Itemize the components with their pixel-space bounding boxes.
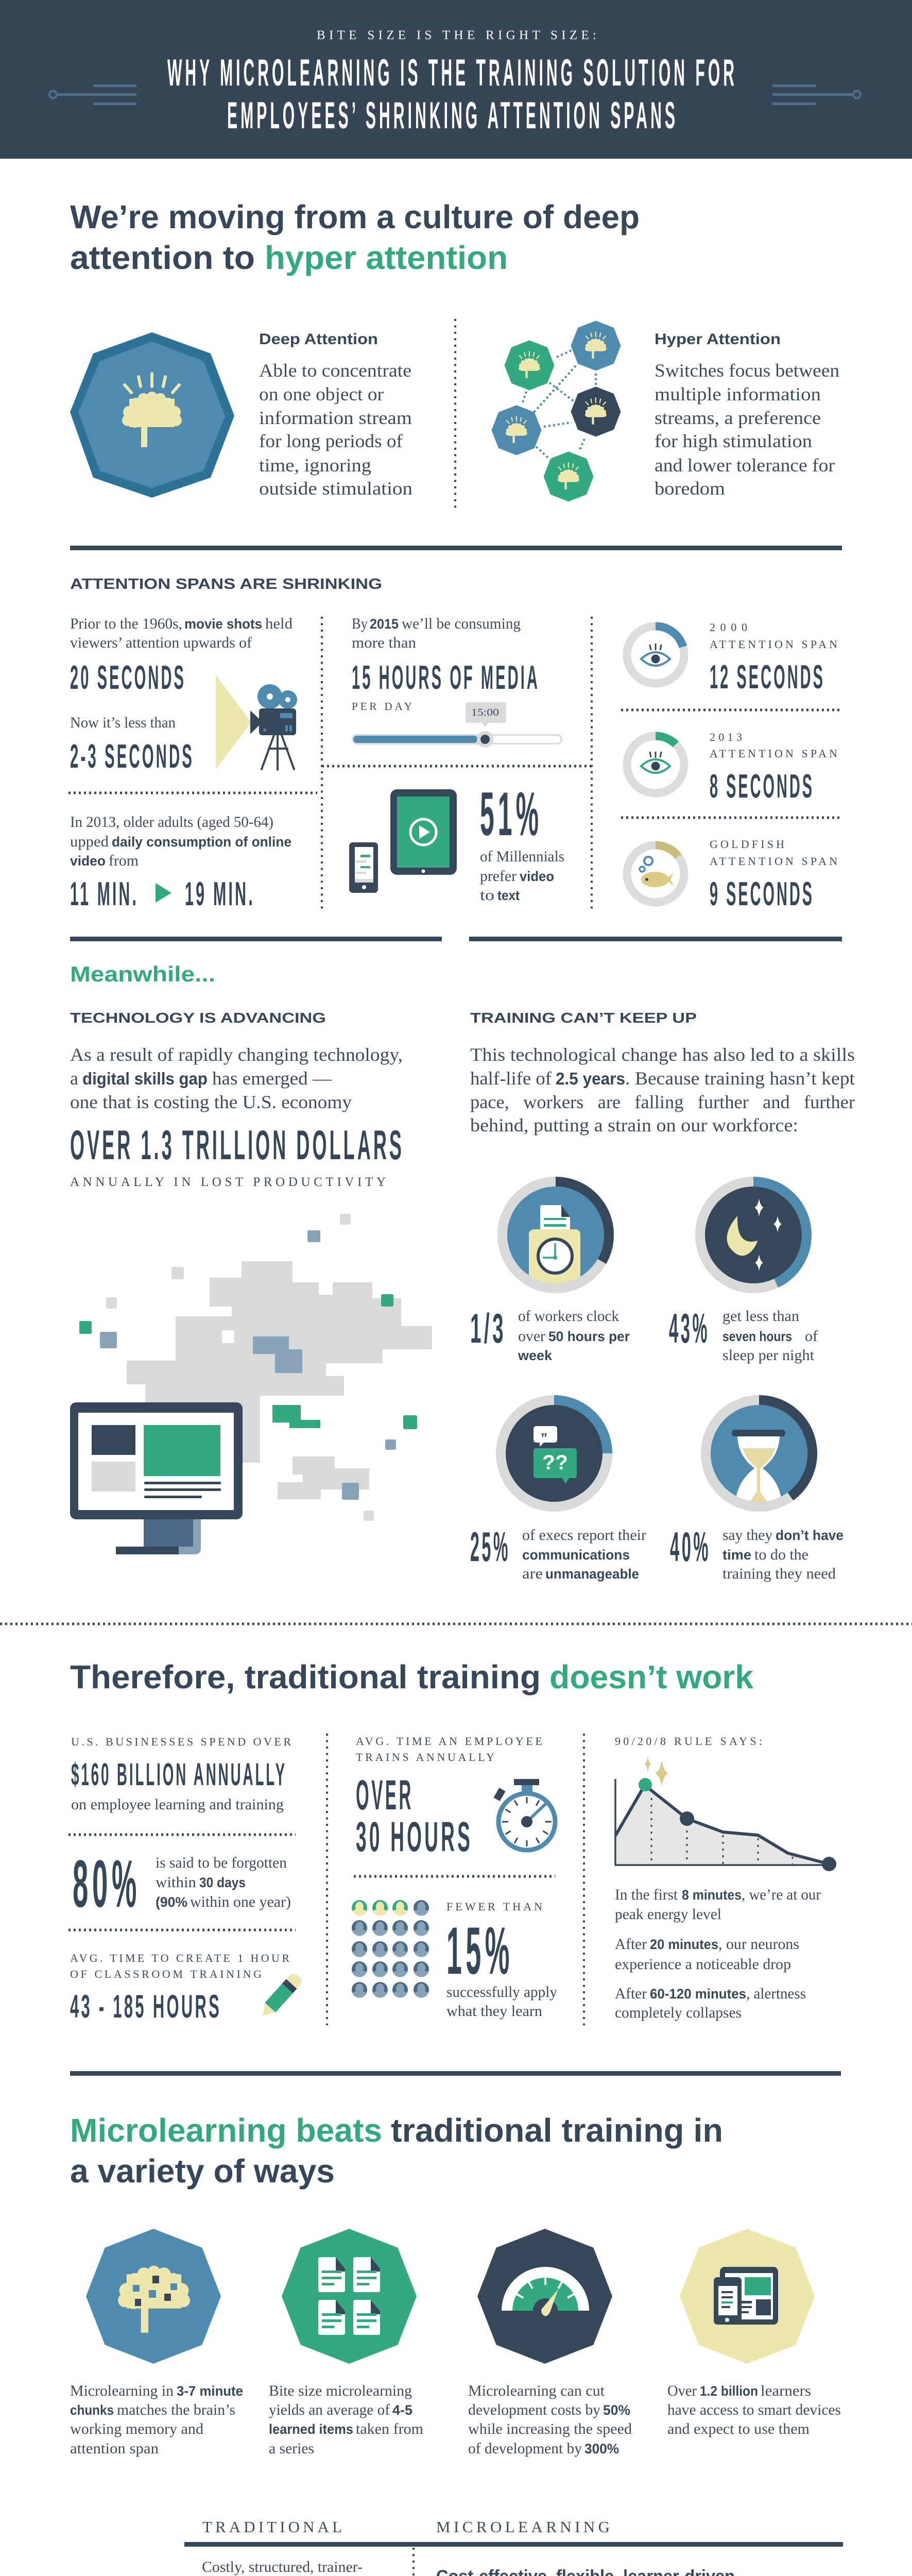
stat: 40 percent no time: time — [722, 1547, 751, 1563]
text: 90/20/8 rule details: , our neurons — [718, 1936, 799, 1953]
stat: 43 to 185 hours: OF CLASSROOM TRAINING — [70, 1968, 262, 1980]
donut: hourglass 40 percent — [705, 1400, 813, 1506]
text: cut development costs: of development by — [468, 2440, 582, 2457]
stat: 43 to 185 hours — [70, 1952, 289, 2025]
stat: older adults online video — [70, 814, 291, 912]
stat: 80 percent forgotten: 30 days — [199, 1875, 246, 1890]
stat: 43 percent sleep: seven hours — [722, 1329, 792, 1344]
stat: movie shots: movie shots — [184, 616, 262, 632]
stat: 43 percent sleep: 43% — [669, 1306, 710, 1352]
heading: deep to hyper attention: We’re moving from a culture of deep — [70, 198, 640, 235]
text: hyper attention — [655, 331, 839, 499]
stat: 43 percent sleep: get less than — [722, 1308, 799, 1325]
icon: brain with memory chunks — [86, 2229, 221, 2364]
text: 4-5 learned items: yields an average of — [269, 2401, 390, 2418]
text: 90/20/8 rule details: In the first — [615, 1886, 678, 1903]
stat: fewer than 15 percent: successfully apply — [446, 1984, 557, 2001]
stat: 40 percent no time: don’t have — [776, 1528, 844, 1543]
map of pixel blocks — [79, 1214, 432, 1521]
text: 2000 attention span — [710, 621, 837, 696]
main title — [167, 52, 737, 137]
text: 3-7 minute chunks: working memory and — [70, 2420, 203, 2437]
panel: training can't keep up: behind, putting a strain on our workforce: — [470, 1115, 798, 1136]
text: hyper attention: streams, a preference — [655, 408, 821, 428]
panel: technology is advancing: As a result of rapidly changing technology, — [70, 1044, 403, 1065]
stat: 25 percent execs: communications — [522, 1547, 630, 1563]
text: 90/20/8 rule heading: 90/20/8 RULE SAYS: — [615, 1735, 762, 1748]
stat: older adults online video: 19 MIN. — [185, 875, 255, 912]
text: deep attention: Able to concentrate — [259, 360, 411, 381]
stat: 1/3 of workers: 1/3 — [470, 1306, 506, 1352]
heading: attention spans are shrinking: ATTENTION SPANS ARE SHRINKING — [70, 576, 382, 592]
text: 1.2 billion learners: and expect to use them — [667, 2420, 810, 2437]
stat: 160 billion annually: on employee learning and training — [71, 1796, 284, 1813]
text: 1.2 billion learners: Over — [667, 2382, 697, 2399]
stat: 43 percent sleep — [669, 1306, 818, 1364]
text: 3-7 minute chunks: attention span — [70, 2440, 159, 2457]
text: 2000 attention span: ATTENTION SPAN — [710, 638, 837, 651]
chart: energy curve — [615, 1756, 836, 1871]
text: deep attention: time, ignoring — [259, 455, 371, 476]
stat: older adults online video: from — [109, 852, 139, 869]
heading: traditional training doesn't work: doesn’t work — [549, 1658, 753, 1696]
donut: speech bubbles 25 percent: ” — [541, 1430, 547, 1446]
column headers — [202, 2518, 610, 2536]
icon: film projector — [216, 675, 297, 770]
ring: goldfish attention span — [627, 845, 684, 903]
stat: 25 percent execs — [470, 1524, 646, 1582]
stat: 40 percent no time: to do the — [754, 1546, 808, 1563]
panel: training can't keep up: . Because training hasn’t kept — [625, 1068, 855, 1089]
stat: 43 percent sleep: sleep per night — [722, 1347, 815, 1364]
text: 1.2 billion learners: learners — [761, 2382, 811, 2399]
icon: speed gauge — [477, 2229, 612, 2364]
text: deep attention: Deep Attention — [259, 331, 378, 348]
text: 90/20/8 rule details: After — [615, 1936, 647, 1953]
text: 90/20/8 rule details: experience a noticeable drop — [615, 1956, 791, 1973]
stat: older adults online video: 11 MIN. — [70, 875, 139, 912]
panel: technology is advancing: has emerged — — [212, 1068, 332, 1089]
text: 90/20/8 rule details — [615, 1886, 821, 2021]
text: hyper attention: boredom — [655, 478, 725, 499]
column headers: MICROLEARNING — [436, 2518, 610, 2536]
panel: training can't keep up: This technological change has also led to a skills — [470, 1044, 855, 1065]
stat: 15 hours of media: 2015 — [370, 616, 399, 632]
heading: traditional training doesn't work — [70, 1658, 753, 1696]
heading: microlearning beats traditional training: a variety of ways — [70, 2153, 335, 2190]
text: deep attention: information stream — [259, 408, 412, 428]
text: 90/20/8 rule details: After — [615, 1985, 647, 2002]
stat: 51 percent of millennials: video — [520, 869, 554, 884]
stat: 80 percent forgotten: 80% — [73, 1846, 141, 1921]
text: 90/20/8 rule details: 60-120 minutes — [650, 1986, 746, 2002]
text: hyper attention: multiple information — [655, 384, 821, 404]
slider: 15:00 — [352, 702, 561, 748]
heading: traditional training doesn't work: Therefore, traditional training — [70, 1658, 541, 1696]
stat: over 30 hours — [356, 1735, 542, 1860]
stat: older adults online video: In 2013, older adults (aged 50-64) — [70, 814, 273, 831]
stat: movie shots: Now it’s less than — [70, 714, 176, 731]
text: hyper attention: and lower tolerance for — [655, 455, 835, 476]
ring: 2000 attention span — [627, 626, 684, 683]
panel: training can't keep up — [470, 1010, 855, 1136]
icon: hyper attention network — [491, 320, 621, 502]
donut: speech bubbles 25 percent — [501, 1400, 608, 1506]
text: cut development costs: 300% — [584, 2441, 619, 2456]
heading: microlearning beats traditional training — [70, 2112, 723, 2190]
stat: over 30 hours: 30 HOURS — [356, 1814, 473, 1860]
stat: 40 percent no time — [670, 1524, 844, 1582]
text: 4-5 learned items: Bite size microlearning — [269, 2382, 412, 2399]
stat: 51 percent of millennials: prefer — [480, 868, 517, 885]
text: 90/20/8 rule details: completely collapses — [615, 2004, 742, 2021]
stat: 25 percent execs: unmanageable — [545, 1566, 639, 1582]
text: cut development costs: 50% — [603, 2402, 630, 2418]
text: 3-7 minute chunks: matches the brain’s — [117, 2401, 235, 2418]
stat: fewer than 15 percent: FEWER THAN — [446, 1900, 542, 1913]
text: 4-5 learned items: taken from — [356, 2420, 423, 2437]
panel: technology is advancing: ANNUALLY IN LOST PRODUCTIVITY — [70, 1175, 386, 1189]
text: deep attention — [259, 331, 412, 499]
stat: 1/3 of workers — [470, 1306, 630, 1363]
stat: 40 percent no time: say they — [722, 1527, 772, 1544]
icon: phone and tablet devices — [680, 2229, 815, 2364]
text: 4-5 learned items — [269, 2382, 423, 2457]
panel: training can't keep up: TRAINING CAN’T KEEP UP — [470, 1010, 697, 1026]
text: goldfish attention span: ATTENTION SPAN — [710, 855, 837, 868]
stat: over 30 hours: TRAINS ANNUALLY — [356, 1751, 494, 1764]
stat: 160 billion annually: U.S. BUSINESSES SPEND OVER — [71, 1735, 291, 1748]
stat: 80 percent forgotten: within — [156, 1874, 196, 1891]
heading: deep to hyper attention: hyper attention — [265, 239, 508, 276]
donut: speech bubbles 25 percent: ?? — [542, 1451, 568, 1474]
stat: 51 percent of millennials: to — [480, 887, 494, 904]
donut: moon icon 43 percent — [700, 1182, 806, 1288]
text: 3-7 minute chunks: chunks — [70, 2402, 114, 2418]
traditional column text: Costly, structured, trainer- — [202, 2558, 363, 2575]
icon: tablet with play button — [390, 789, 457, 875]
stat: 25 percent execs: 25% — [470, 1524, 510, 1570]
donut: clock icon 1/3 — [503, 1182, 609, 1291]
icon: deep attention brain badge — [70, 332, 234, 498]
text: OVER 1.3 TRILLION DOLLARS — [70, 1122, 404, 1168]
stat: 15 hours of media: PER DAY — [352, 700, 412, 713]
subtitle: BITE SIZE IS THE RIGHT SIZE: — [317, 28, 596, 42]
text: 90/20/8 rule details: 20 minutes — [650, 1937, 718, 1952]
icon: phone — [349, 842, 378, 893]
text: 3-7 minute chunks — [70, 2382, 243, 2457]
stat: 25 percent execs: of execs report their — [522, 1527, 646, 1544]
text: 3-7 minute chunks: Microlearning in — [70, 2382, 174, 2399]
heading: microlearning beats traditional training: traditional training in — [391, 2112, 723, 2149]
header banner — [0, 0, 912, 159]
stat: 25 percent execs: are — [522, 1565, 543, 1582]
stat: 15 hours of media: we’ll be consuming — [402, 615, 521, 632]
text: 3-7 minute chunks: 3-7 minute — [177, 2383, 243, 2399]
text: 90/20/8 rule details: peak energy level — [615, 1906, 721, 1923]
text: goldfish attention span: GOLDFISH — [710, 838, 784, 851]
column headers: TRADITIONAL — [202, 2518, 342, 2536]
icon: pencil — [257, 1971, 304, 2021]
text: 2000 attention span: 2000 — [710, 621, 747, 634]
stat: 51 percent of millennials: 51% — [480, 779, 542, 849]
heading: microlearning beats traditional training: Microlearning beats — [70, 2112, 382, 2149]
ring: 2013 attention span — [627, 736, 684, 793]
stat: movie shots — [70, 615, 292, 775]
stat: 40 percent no time: 40% — [670, 1524, 711, 1570]
panel: training can't keep up: 2.5 years — [556, 1069, 625, 1088]
stat: movie shots: held — [265, 615, 292, 632]
text: cut development costs: Microlearning can cut — [468, 2382, 605, 2399]
text: hyper attention: Hyper Attention — [655, 331, 781, 348]
text: 2013 attention span: 2013 — [710, 731, 742, 743]
text: cut development costs: development costs by — [468, 2401, 600, 2418]
text: 1.2 billion learners — [667, 2382, 841, 2437]
stat: 40 percent no time: training they need — [722, 1565, 836, 1582]
stat: 51 percent of millennials: text — [497, 888, 520, 903]
text: deep attention: outside stimulation — [259, 478, 412, 499]
text: 15 HOURS OF MEDIA — [352, 658, 540, 696]
stat: 43 to 185 hours: 43 - 185 HOURS — [70, 1989, 221, 2025]
stat: 1/3 of workers: week — [518, 1348, 553, 1363]
slider: 15:00: 15:00 — [471, 707, 499, 718]
comparison table — [73, 2518, 843, 2576]
stat: 15 hours of media: By — [352, 615, 368, 632]
icon: document grid — [282, 2229, 417, 2364]
panel: technology is advancing: TECHNOLOGY IS ADVANCING — [70, 1010, 326, 1026]
text: deep attention: on one object or — [259, 384, 384, 404]
stat: movie shots: 2-3 SECONDS — [70, 737, 194, 775]
icon: desktop monitor — [70, 1402, 243, 1554]
text: 4-5 learned items: learned items — [269, 2421, 353, 2437]
panel: technology is advancing: one that is costing the U.S. economy — [70, 1092, 352, 1112]
stat: 1/3 of workers: over — [518, 1328, 545, 1345]
text: hyper attention: Switches focus between — [655, 360, 839, 381]
stat: older adults online video: daily consumption of online — [112, 834, 291, 850]
stat: 15 hours of media: more than — [352, 634, 416, 651]
text: hyper attention: for high stimulation — [655, 431, 812, 451]
text: 1.2 billion learners: have access to smart devices — [667, 2401, 841, 2418]
header ornament right — [772, 84, 861, 105]
stat: fewer than 15 percent: 15% — [446, 1913, 513, 1988]
heading: meanwhile: Meanwhile... — [70, 962, 215, 986]
stat: 80 percent forgotten: within one year) — [190, 1893, 291, 1910]
panel: technology is advancing — [70, 1010, 404, 1189]
stat: 1/3 of workers: of workers clock — [518, 1308, 619, 1325]
text: 4-5 learned items: a series — [269, 2440, 314, 2457]
text: 4-5 learned items: 4-5 — [392, 2402, 412, 2418]
text: deep attention: for long periods of — [259, 431, 403, 451]
stat: 43 percent sleep: of — [805, 1328, 818, 1345]
text: cut development costs — [468, 2382, 632, 2457]
stat: movie shots: Prior to the 1960s, — [70, 615, 182, 632]
stat: older adults online video: upped — [70, 833, 109, 850]
stat: 15 hours of media — [352, 615, 540, 713]
icon: stopwatch — [493, 1779, 555, 1850]
stat: movie shots: 20 SECONDS — [70, 658, 186, 696]
text: cut development costs: while increasing the speed — [468, 2420, 632, 2437]
panel: technology is advancing: a — [70, 1068, 78, 1089]
heading: deep to hyper attention: attention to — [70, 239, 255, 276]
icon: people grid — [352, 1900, 429, 1998]
stat: 43 to 185 hours: AVG. TIME TO CREATE 1 HOUR — [70, 1952, 289, 1964]
text: $160 BILLION ANNUALLY — [71, 1757, 287, 1792]
stat: fewer than 15 percent: what they learn — [446, 2003, 542, 2020]
text: 90/20/8 rule details: , alertness — [746, 1985, 806, 2002]
stat: 1/3 of workers: 50 hours per — [548, 1329, 630, 1344]
stat: 80 percent forgotten: is said to be forgotten — [156, 1854, 287, 1871]
heading: deep to hyper attention — [70, 198, 640, 276]
stat: 51 percent of millennials: of Millennials — [480, 848, 564, 865]
stat: 80 percent forgotten: (90% — [156, 1894, 187, 1910]
stat: fewer than 15 percent — [446, 1900, 557, 2020]
text: goldfish attention span — [710, 838, 837, 912]
stat: over 30 hours: AVG. TIME AN EMPLOYEE — [356, 1735, 542, 1748]
panel: technology is advancing: digital skills gap — [82, 1069, 208, 1088]
text: 2013 attention span — [710, 731, 837, 805]
stat: 51 percent of millennials — [480, 779, 564, 904]
stat: older adults online video: video — [70, 853, 106, 869]
stat: movie shots: viewers’ attention upwards of — [70, 634, 252, 651]
panel: training can't keep up: pace, workers are falling further and further — [470, 1092, 855, 1112]
stat: 160 billion annually — [71, 1735, 291, 1813]
text: 90/20/8 rule details: , we’re at our — [742, 1886, 821, 1903]
stat: over 30 hours: OVER — [356, 1772, 414, 1819]
header ornament left — [49, 84, 136, 105]
text: 2013 attention span: ATTENTION SPAN — [710, 747, 837, 760]
text: 90/20/8 rule details: 8 minutes — [682, 1887, 742, 1903]
panel: training can't keep up: half-life of — [470, 1068, 552, 1089]
text: 1.2 billion learners: 1.2 billion — [700, 2383, 758, 2399]
